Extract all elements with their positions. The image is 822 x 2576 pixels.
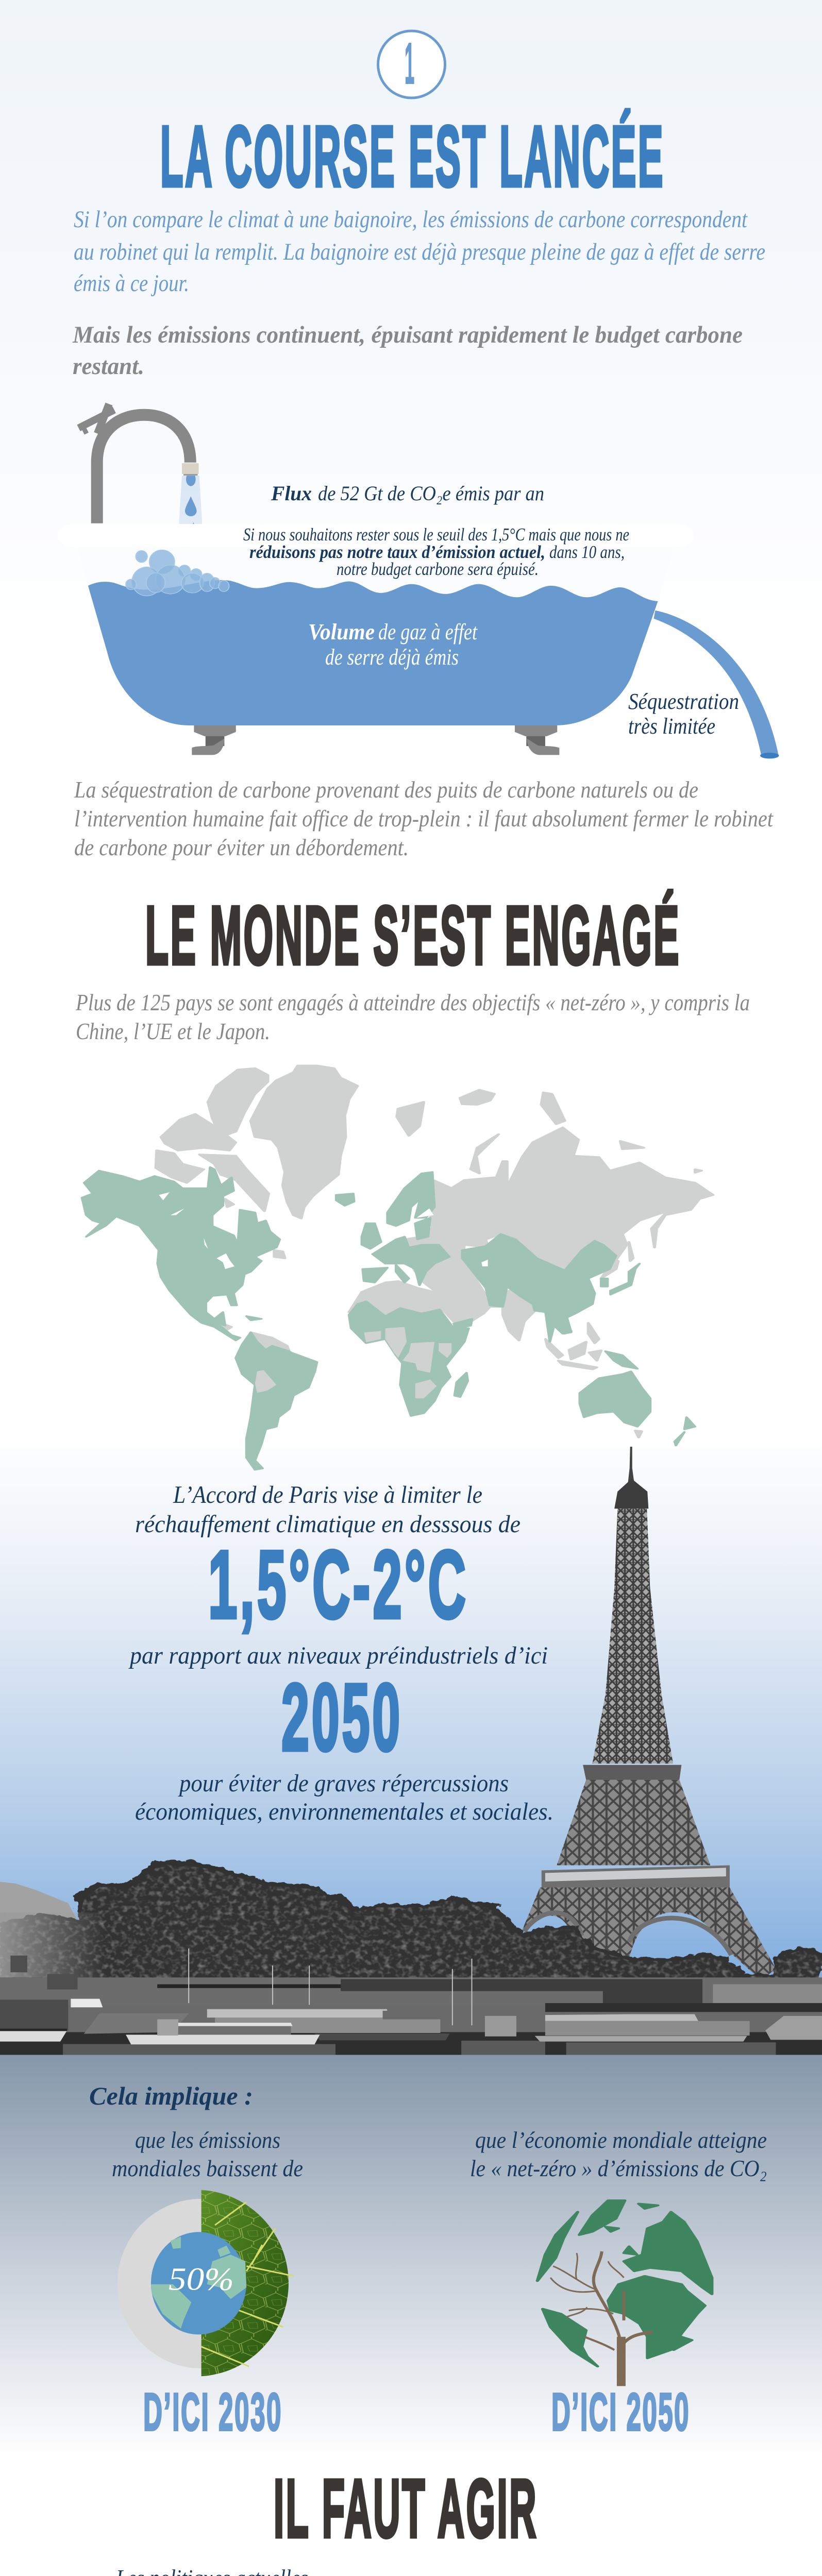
water stream and drops: [176, 476, 206, 578]
masts and vertical details: [189, 1948, 472, 2025]
target year figure: 2050: [281, 1665, 402, 1771]
section number badge: [378, 31, 445, 98]
Paris agreement conclusion text: économiques, environnementales et sociales.: [135, 1798, 553, 1825]
arch structure: [524, 1913, 731, 1955]
implication label: Cela implique :: [89, 2081, 253, 2110]
overflow pipe: [653, 611, 779, 758]
bath label: sequestration: [628, 689, 739, 739]
text: D’ICI 2030: [143, 2382, 282, 2442]
tower base and legs: [522, 1888, 776, 1980]
quay road: [66, 2006, 822, 2032]
leaf half: [202, 2190, 294, 2376]
bathtub illustration: [58, 404, 779, 758]
bath label: flux: de 52 Gt de CO₂e émis par an: [318, 482, 544, 505]
tree: [550, 2251, 652, 2386]
boats: [0, 1999, 822, 2044]
river water: [0, 2032, 822, 2055]
water in bath: [88, 580, 658, 725]
right column text: que l’économie mondiale atteigne: [475, 2127, 767, 2153]
section number badge: 1: [405, 31, 415, 96]
middle section: [557, 1780, 710, 1865]
intro paragraph: émis à ce jour.: [74, 270, 189, 297]
clipped hedge row: [341, 1979, 702, 2003]
Paris agreement text: [135, 1481, 521, 1538]
building behind trees: [115, 1937, 257, 1977]
left column text: mondiales baissent de: [112, 2155, 303, 2181]
Paris agreement text: réchauffement climatique en desssous de: [135, 1511, 521, 1538]
emphasis paragraph: Mais les émissions continuent, épuisant rapidement le budget carbone: [72, 321, 743, 348]
committed land: [82, 1167, 695, 1470]
Paris riverbank scene: [0, 1860, 822, 2055]
leaf texture: [0, 1865, 822, 1979]
right column text: [470, 2127, 767, 2181]
globe continents: [538, 2200, 712, 2366]
sign panels: [10, 1956, 78, 1989]
left buildings: [0, 1882, 77, 1958]
tower top cabin: [614, 1479, 648, 1509]
gray patches inside committed land: [255, 1327, 451, 1398]
Paris agreement text continued: par rapport aux niveaux préindustriels d’ici: [128, 1642, 548, 1669]
net-zero commitment text: Chine, l’UE et le Japon.: [76, 1019, 270, 1044]
upper shaft: [592, 1509, 673, 1764]
Paris agreement text: L’Accord de Paris vise à limiter le: [173, 1481, 482, 1509]
spire: [627, 1447, 635, 1492]
page background: implication band: [0, 2055, 822, 2458]
50% emissions chart: leaf and earth: [118, 2190, 294, 2376]
bath label: volume: de gaz à effet: [378, 619, 478, 645]
bath body: [79, 547, 674, 601]
bath label: volume: de serre déjà émis: [325, 645, 459, 670]
bath label: volume: [308, 619, 478, 670]
bath label: warning: notre budget carbone sera épuisé.: [337, 559, 539, 579]
right column text: le « net-zéro » d’émissions de CO₂: [470, 2155, 767, 2181]
sequestration paragraph: [74, 777, 774, 860]
bath feet: [192, 725, 559, 755]
intro paragraph: [74, 206, 765, 297]
emphasis paragraph: [72, 321, 743, 380]
gray remaining half: [118, 2199, 202, 2368]
second platform: [583, 1765, 681, 1780]
world map of net-zero commitments: [82, 1065, 713, 1470]
bath label: sequestration: Séquestration: [628, 689, 739, 714]
bubbles: [126, 550, 229, 596]
non-committed land: [156, 1065, 713, 1437]
lower interior lattice: [574, 1925, 632, 1972]
temperature target figure: 1,5°C-2°C: [208, 1531, 468, 1638]
Paris agreement conclusion text: [135, 1770, 553, 1825]
bath label: warning: dans 10 ans,: [549, 542, 625, 562]
50 percent label: 50%: [169, 2261, 234, 2297]
left column text: que les émissions: [135, 2127, 280, 2153]
quay wall: [0, 1977, 822, 2007]
bath label: flux: Flux: [271, 482, 312, 505]
earth circle: [151, 2232, 246, 2334]
bath label: sequestration: très limitée: [628, 714, 715, 739]
bath label: warning: Si nous souhaitons rester sous le seuil des 1,5°C mais que nous ne: [243, 524, 629, 545]
Paris agreement conclusion text: pour éviter de graves répercussions: [178, 1770, 509, 1797]
page background: top: [0, 0, 822, 670]
sequestration paragraph: La séquestration de carbone provenant des puits de carbone naturels ou de: [74, 777, 698, 803]
tree line: [0, 1860, 822, 1984]
left column text: [112, 2127, 303, 2181]
sequestration paragraph: de carbone pour éviter un débordement.: [74, 835, 409, 860]
bath label: warning: [243, 524, 629, 579]
hazy left area: [0, 1912, 105, 1977]
bath label: volume: Volume: [308, 619, 375, 645]
Eiffel tower: [522, 1447, 776, 1980]
first platform: [542, 1865, 730, 1888]
globe tree illustration: [538, 2200, 712, 2386]
bath rim: [58, 524, 694, 547]
page background: Paris sky: [0, 1432, 822, 2055]
bath label: warning: réduisons pas notre taux d’émission actuel,: [249, 542, 545, 562]
faucet: [79, 404, 199, 523]
emphasis paragraph: restant.: [73, 353, 144, 380]
map lakes and inland seas: [159, 1192, 488, 1269]
net-zero commitment text: [75, 990, 750, 1044]
